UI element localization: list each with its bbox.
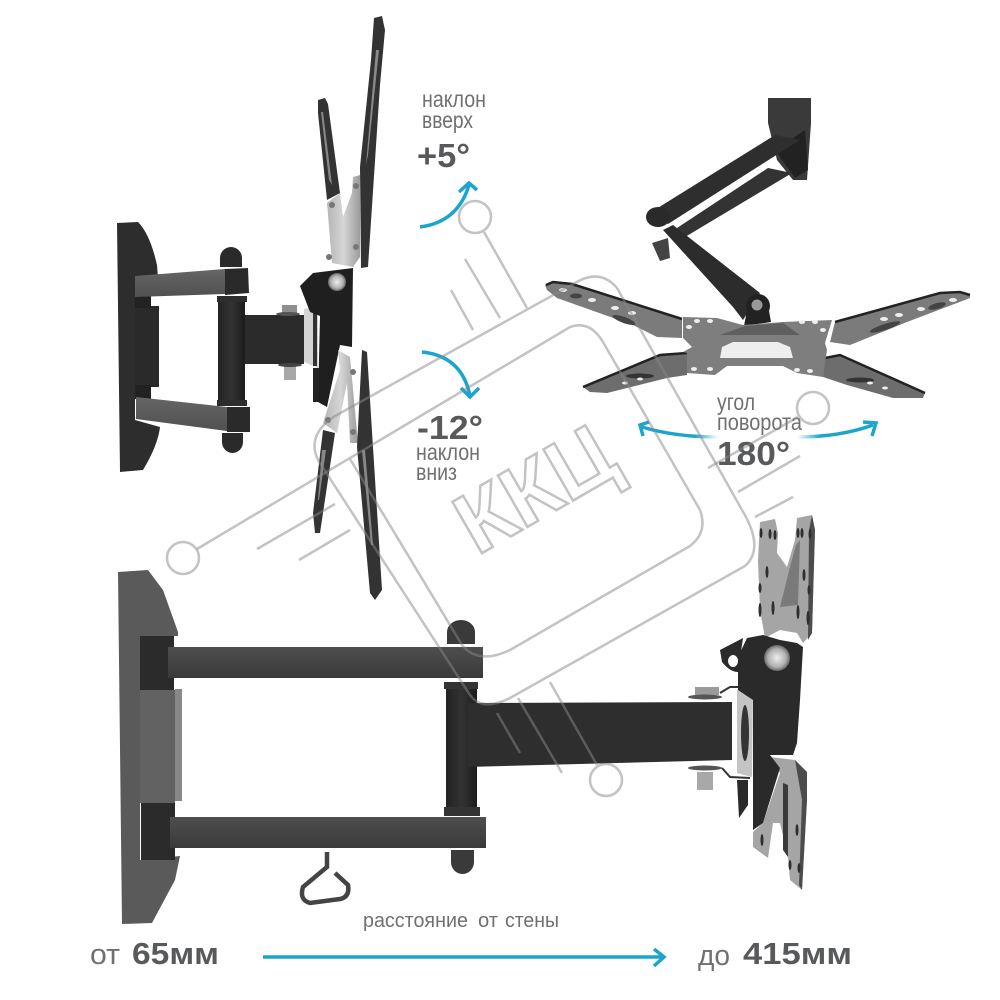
text: rotation: поворота [717, 409, 802, 435]
wall bracket top [768, 98, 811, 180]
bottom bolt [688, 766, 750, 790]
arm lower right [823, 355, 925, 398]
top view of mount: rotation [545, 98, 970, 398]
text: to 415 mm: до [698, 940, 730, 972]
text: tilt down: наклон [416, 439, 480, 465]
end caps [447, 620, 475, 874]
text: from 65 mm: 65мм [132, 936, 219, 971]
front arm [663, 225, 760, 320]
text: distance from wall [363, 910, 559, 932]
top bolt [688, 687, 750, 700]
pivot column [217, 296, 247, 406]
upper TV plate [758, 515, 815, 643]
text: tilt up [417, 86, 486, 174]
upper rail short [318, 98, 340, 200]
pivot column [444, 682, 480, 816]
centre body [683, 317, 832, 377]
end caps [220, 247, 243, 453]
joint knob [646, 207, 670, 261]
X plate [545, 281, 970, 398]
black tilt plate [300, 268, 353, 407]
text: distance from wall: стены [505, 910, 559, 932]
arrow: tilt up [420, 183, 477, 227]
arm upper left [545, 281, 682, 338]
lower arm [136, 397, 250, 432]
arrows: rotation [640, 422, 876, 437]
arm upper [648, 135, 800, 224]
centre shading [720, 323, 800, 335]
watermark circles [167, 201, 829, 796]
text: tilt up: наклон [422, 86, 486, 112]
lower silver plate [323, 350, 358, 443]
text: rotation [717, 389, 802, 472]
text: from 65 mm [90, 936, 219, 971]
text: rotation: 180° [717, 435, 790, 472]
watermark connectors [257, 232, 800, 773]
upper rail long [360, 16, 385, 268]
plate upper hinge [140, 636, 174, 690]
watermark: KKC logo [167, 201, 829, 796]
text: rotation: угол [717, 389, 755, 415]
wall plate, side view [117, 222, 160, 472]
lower rail long [357, 350, 382, 600]
upper arm [135, 268, 249, 297]
text: distance from wall: от [478, 910, 498, 932]
lower TV plate [753, 757, 807, 890]
text: tilt down: вниз [416, 459, 457, 485]
hanging hook [302, 852, 348, 903]
plate pivot [744, 294, 771, 326]
text: to 415 mm [698, 936, 852, 972]
lower arm [170, 817, 486, 848]
text: to 415 mm: 415мм [743, 936, 852, 971]
text: from 65 mm: от [90, 939, 120, 971]
centre window [720, 342, 793, 358]
silver hinge bracket [304, 306, 319, 402]
text: distance from wall: расстояние [363, 910, 468, 932]
arrow: extension [263, 949, 664, 966]
upper arm [168, 647, 483, 678]
plate hinges [135, 296, 151, 399]
second arm [244, 315, 304, 364]
hinge bolts [276, 305, 302, 380]
lower rail short [313, 430, 335, 533]
tilt screw [328, 273, 346, 291]
large front view of mount: extension [118, 515, 815, 924]
plate middle block [140, 689, 182, 803]
mounting holes [559, 288, 957, 390]
tilt plate ear [720, 638, 743, 672]
text: tilt up: вверх [422, 107, 473, 133]
text: tilt up: +5° [417, 137, 470, 174]
text: tilt down [416, 409, 483, 485]
plate lower hinge [141, 803, 175, 860]
second arm [467, 702, 732, 767]
plate centre block [135, 306, 159, 387]
black tilt plate [738, 635, 803, 830]
arm lower [677, 168, 792, 237]
upper silver plate [326, 175, 360, 267]
watermark lettering: ККЦ [438, 405, 632, 572]
arm upper right [830, 292, 970, 345]
watermark inner frame [197, 325, 702, 656]
silver bracket [737, 688, 753, 818]
text: tilt down: -12° [417, 409, 483, 446]
arm lower left [583, 353, 687, 393]
watermark outer frame [314, 277, 754, 704]
tilt screw [764, 645, 790, 671]
wall plate [118, 570, 180, 924]
side view of mount: tilt [117, 16, 385, 600]
arrow: tilt down [422, 352, 479, 397]
